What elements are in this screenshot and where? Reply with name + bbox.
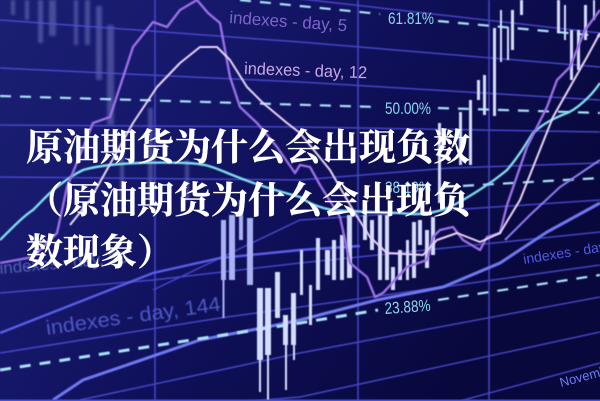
level label 61.81%: 61.81% (388, 10, 434, 28)
level label 23.88%: 23.88% (384, 297, 431, 318)
label: indexes day 144: indexes - day, 144 (45, 294, 222, 340)
candlesticks left dim (221, 200, 253, 318)
title: 数现象） (26, 233, 174, 274)
curve: lower purple (505, 160, 600, 240)
blurred candles top left (11, 0, 189, 200)
curve: purple 5-day (0, 0, 600, 297)
curve: teal 55-day (0, 83, 600, 240)
title: 原油期货为什么会出现负数 (26, 128, 470, 169)
label: indexes day 12: indexes - day, 12 (244, 59, 367, 82)
level label 50.00%: 50.00% (385, 100, 431, 118)
label: indexes day 5: indexes - day, 5 (229, 8, 348, 35)
candlesticks (257, 0, 595, 400)
rising trend line (53, 203, 600, 400)
curve: light 12-day (70, 33, 600, 255)
title: （原油期货为什么会出现负 (26, 180, 470, 222)
rising line left (0, 246, 360, 333)
level label 38.19%: 38.19% (385, 179, 431, 197)
bottom edge strip (0, 400, 600, 401)
label: indexes day 55: indexes - day, 55 (0, 248, 128, 278)
title (26, 128, 470, 274)
